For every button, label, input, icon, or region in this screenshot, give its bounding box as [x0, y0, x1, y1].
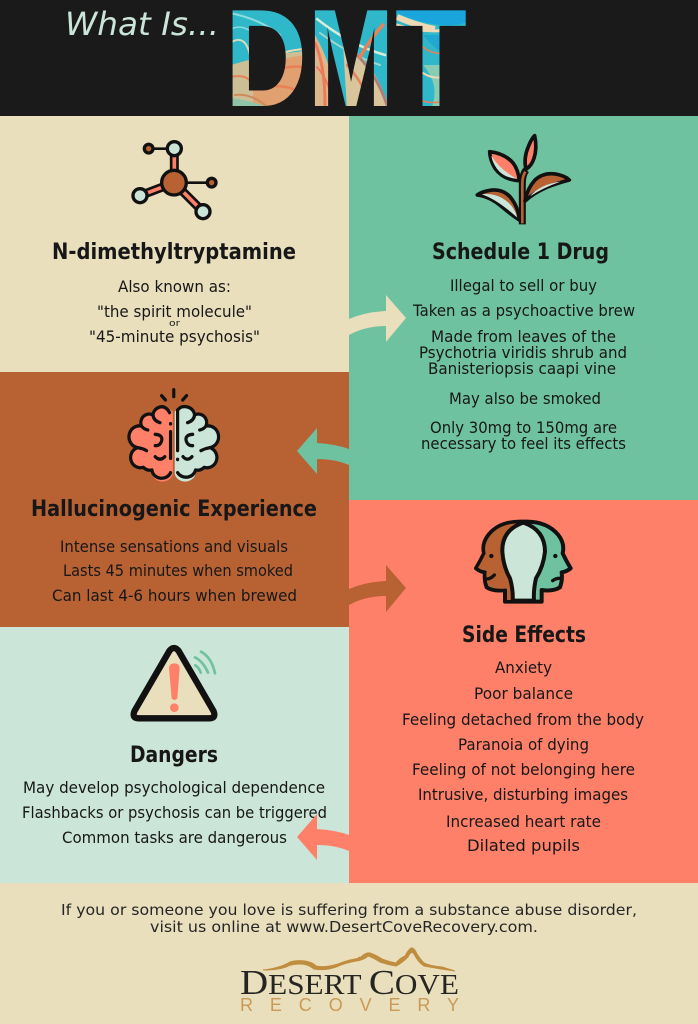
- symptoms: Poor balance: [474, 684, 573, 703]
- risks: [22, 778, 327, 847]
- facts: [412, 276, 635, 453]
- panel: Hallucinogenic Experience: [0, 372, 349, 627]
- heading: Schedule 1 Drug: [432, 239, 609, 265]
- icon: warning triangle: [134, 648, 215, 718]
- symptoms: Feeling detached from the body: [402, 710, 644, 729]
- panel: Side Effects: [349, 500, 698, 883]
- arrow: salmon left: [297, 814, 349, 860]
- risks: May develop psychological dependence: [23, 778, 325, 797]
- symptoms: Dilated pupils: [467, 836, 580, 855]
- icon: molecule: [133, 142, 216, 219]
- facts: Taken as a psychoactive brew: [412, 301, 635, 320]
- symptoms: [402, 658, 644, 855]
- symptoms: Anxiety: [495, 658, 552, 677]
- title: DMT: [225, 0, 467, 136]
- logo: Desert Cove Recovery: DESERT COVE: [240, 963, 459, 1002]
- footer: [0, 883, 698, 1024]
- facts: Can last 4-6 hours when brewed: [52, 586, 297, 605]
- heading: Hallucinogenic Experience: [31, 496, 317, 522]
- facts: Intense sensations and visuals: [60, 537, 288, 556]
- aliases: "45-minute psychosis": [89, 327, 260, 346]
- panel: N-dimethyltryptamine: [0, 116, 349, 372]
- panel: Dangers: [0, 627, 349, 883]
- facts: Psychotria viridis shrub and: [419, 343, 627, 362]
- heading: Dangers: [130, 742, 218, 768]
- symptoms: Intrusive, disturbing images: [418, 785, 628, 804]
- call to action: visit us online at www.DesertCoveRecovery.com.: [150, 918, 538, 936]
- arrow: cream right: [349, 295, 406, 342]
- facts: necessary to feel its effects: [421, 434, 626, 453]
- facts: Illegal to sell or buy: [450, 276, 597, 295]
- heading: Side Effects: [462, 622, 586, 648]
- facts: May also be smoked: [449, 389, 601, 408]
- aliases: Also known as:: [118, 277, 231, 296]
- symptoms: Increased heart rate: [446, 812, 601, 831]
- facts: [52, 537, 297, 605]
- call to action: [61, 901, 637, 936]
- risks: Flashbacks or psychosis can be triggered: [22, 803, 327, 822]
- call to action: If you or someone you love is suffering from a substance abuse disorder,: [61, 901, 637, 919]
- risks: Common tasks are dangerous: [62, 828, 287, 847]
- facts: Made from leaves of the: [431, 327, 616, 346]
- header band: [0, 0, 698, 136]
- aliases: or: [169, 319, 180, 329]
- icon: two heads: [476, 522, 571, 602]
- heading: N-dimethyltryptamine: [52, 239, 296, 265]
- facts: Lasts 45 minutes when smoked: [63, 561, 293, 580]
- aliases: [89, 277, 260, 346]
- icon: brain: [129, 390, 219, 482]
- facts: Only 30mg to 150mg are: [430, 418, 617, 437]
- title: What Is...: What Is...: [65, 5, 219, 43]
- logo: Desert Cove Recovery: RECOVERY: [240, 995, 459, 1015]
- aliases: "the spirit molecule": [97, 302, 252, 321]
- panel: Schedule 1 Drug: [349, 116, 698, 500]
- symptoms: Feeling of not belonging here: [412, 760, 635, 779]
- icon: plant: [477, 136, 569, 224]
- symptoms: Paranoia of dying: [458, 735, 589, 754]
- facts: Banisteriopsis caapi vine: [428, 359, 616, 378]
- logo: Desert Cove Recovery: [240, 948, 459, 1015]
- arrow: brown right: [349, 565, 406, 612]
- arrow: green left: [297, 428, 349, 474]
